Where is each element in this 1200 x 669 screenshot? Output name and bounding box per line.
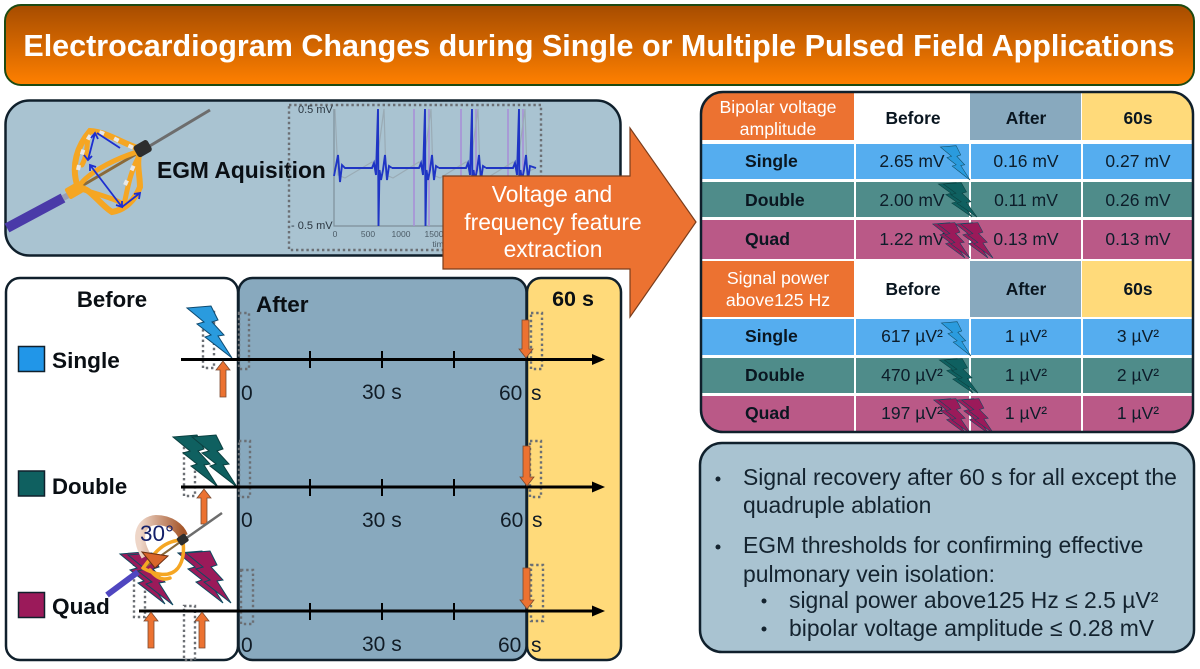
row: double voltage xyxy=(701,182,1193,217)
row: double voltage: 0.26 mV xyxy=(1105,190,1171,210)
panel: 60 s: 60 s xyxy=(552,287,594,311)
header row: bipolar voltage amplitude: Bipolar voltage xyxy=(719,97,837,117)
row: double power xyxy=(701,358,1193,393)
header row: signal power: 60s xyxy=(1123,279,1153,299)
row: double power: 470 µV² xyxy=(881,365,943,385)
legend: quad xyxy=(18,592,110,619)
row: quad power: 197 µV² xyxy=(881,403,943,423)
bullet: EGM thresholds: bipolar voltage amplitude ≤ 0.28 mV xyxy=(789,615,1155,641)
row: double power: 2 µV² xyxy=(1117,365,1159,385)
chart: EGM trace: - 0.5 mV xyxy=(291,220,333,232)
timeline: single xyxy=(181,306,605,405)
row: single power: 3 µV² xyxy=(1117,326,1159,346)
timeline: single: 0 xyxy=(241,382,253,405)
arrow: before recording xyxy=(197,489,211,524)
bullet: signal recovery xyxy=(716,464,1177,518)
icon: rotated catheter with 30 degree arc: 30° xyxy=(140,521,174,546)
panel: before: Before xyxy=(77,287,147,312)
arrow: 60 s recording xyxy=(519,320,533,358)
header row: bipolar voltage amplitude: amplitude xyxy=(740,119,817,139)
chart: EGM trace: 1000 xyxy=(392,229,411,239)
title banner: Electrocardiogram Changes during Single or Multiple Pulsed Field Applications xyxy=(23,29,1175,63)
header row: bipolar voltage amplitude: Before xyxy=(885,108,941,128)
chart: EGM trace: tim xyxy=(432,239,444,249)
row: quad power: Quad xyxy=(745,403,790,423)
row: single voltage: 0.16 mV xyxy=(993,151,1059,171)
bullet: EGM thresholds xyxy=(716,532,1159,641)
arrow: voltage and frequency feature extraction: frequency feature xyxy=(464,209,642,235)
header row: bipolar voltage amplitude: 60s xyxy=(1123,108,1153,128)
row: quad voltage: 0.13 mV xyxy=(993,229,1059,249)
header row: signal power: After xyxy=(1006,279,1047,299)
panel: after xyxy=(238,278,526,660)
timeline: quad xyxy=(120,551,605,660)
title banner xyxy=(5,5,1194,85)
row: quad power: 1 µV² xyxy=(1117,403,1159,423)
bullet: signal recovery: quadruple ablation xyxy=(743,492,931,518)
panel: key findings xyxy=(700,443,1194,652)
panel: EGM acquisition xyxy=(6,100,620,256)
row: quad voltage: Quad xyxy=(745,229,790,249)
chart: EGM trace: 1500 xyxy=(425,229,444,239)
bullet: signal recovery: Signal recovery after 60 s for all except the xyxy=(743,464,1177,490)
icon: rotated catheter with 30 degree arc xyxy=(107,513,222,595)
heading: EGM acquisition: EGM Aquisition xyxy=(157,157,326,183)
arrow: 60 s recording xyxy=(520,446,534,486)
header row: signal power: Signal power xyxy=(727,268,829,288)
bullet: EGM thresholds: signal power above125 Hz ≤ 2.5 µV² xyxy=(789,587,1159,613)
row: single voltage: 0.27 mV xyxy=(1105,151,1171,171)
timeline: double: 30 s xyxy=(362,509,402,532)
icon: quad pulse bolts xyxy=(120,551,231,605)
row: single power: 617 µV² xyxy=(881,326,943,346)
row: quad power xyxy=(701,396,1193,432)
header row: bipolar voltage amplitude xyxy=(701,92,1193,140)
row: double voltage: 0.11 mV xyxy=(994,190,1058,210)
chart: EGM trace: 0 xyxy=(333,229,338,239)
arrow: 60 s recording xyxy=(520,568,534,609)
header row: signal power xyxy=(701,261,1193,317)
header row: bipolar voltage amplitude: After xyxy=(1006,108,1047,128)
timeline: quad: 0 xyxy=(241,634,253,657)
row: double power: 1 µV² xyxy=(1005,365,1047,385)
row: single voltage: 2.65 mV xyxy=(879,151,945,171)
arrow: voltage and frequency feature extraction xyxy=(443,128,696,317)
row: double power: Double xyxy=(745,365,805,385)
row: quad voltage: 1.22 mV xyxy=(879,229,945,249)
icon: double pulse bolts xyxy=(173,435,237,487)
panel: 60 s xyxy=(527,278,621,660)
chart: EGM trace xyxy=(289,104,541,250)
panel: after: After xyxy=(256,292,309,317)
row: single power: 1 µV² xyxy=(1005,326,1047,346)
timeline: single: 60 xyxy=(499,382,522,405)
legend: single: Single xyxy=(52,348,120,373)
row: double voltage: Double xyxy=(745,190,805,210)
arrow: first before recording xyxy=(144,612,158,648)
arrow: voltage and frequency feature extraction: Voltage and xyxy=(492,181,612,207)
icon: single pulse bolt xyxy=(187,306,232,358)
row: quad voltage xyxy=(701,220,1193,259)
row: single power: Single xyxy=(745,326,798,346)
legend: quad: Quad xyxy=(52,594,110,619)
row: quad power: 1 µV² xyxy=(1005,403,1047,423)
timeline: quad: s xyxy=(531,634,542,657)
header row: signal power: Before xyxy=(885,279,941,299)
timeline: quad: 60 xyxy=(498,634,521,657)
timeline: double xyxy=(173,435,605,532)
row: double voltage: 2.00 mV xyxy=(879,190,945,210)
bullet: EGM thresholds: EGM thresholds for confirming effective xyxy=(743,532,1143,558)
chart: EGM trace: 0.5 mV xyxy=(298,104,334,116)
legend: double: Double xyxy=(52,474,127,499)
timeline: double: s xyxy=(532,509,542,532)
arrow: before recording xyxy=(216,361,230,397)
arrow: voltage and frequency feature extraction: extraction xyxy=(504,236,602,262)
icon: basket catheter xyxy=(7,110,210,228)
header row: signal power: above125 Hz xyxy=(726,290,830,310)
bullet: EGM thresholds: pulmonary vein isolation: xyxy=(743,561,995,587)
timeline: double: 0 xyxy=(241,509,253,532)
row: single voltage: Single xyxy=(745,151,798,171)
timeline: quad: 30 s xyxy=(362,633,402,656)
panel: before xyxy=(6,278,238,660)
timeline: single: s xyxy=(531,382,542,405)
panel: results table xyxy=(701,92,1193,434)
legend: single xyxy=(18,346,120,373)
arrow: second before recording xyxy=(195,612,209,648)
timeline: double: 60 xyxy=(500,509,523,532)
icons: table pulse bolts xyxy=(933,146,994,434)
row: single power xyxy=(701,319,1193,355)
row: single voltage xyxy=(701,144,1193,179)
legend: double xyxy=(18,471,127,499)
timeline: single: 30 s xyxy=(362,381,402,404)
chart: EGM trace: 500 xyxy=(361,229,375,239)
row: quad voltage: 0.13 mV xyxy=(1105,229,1171,249)
